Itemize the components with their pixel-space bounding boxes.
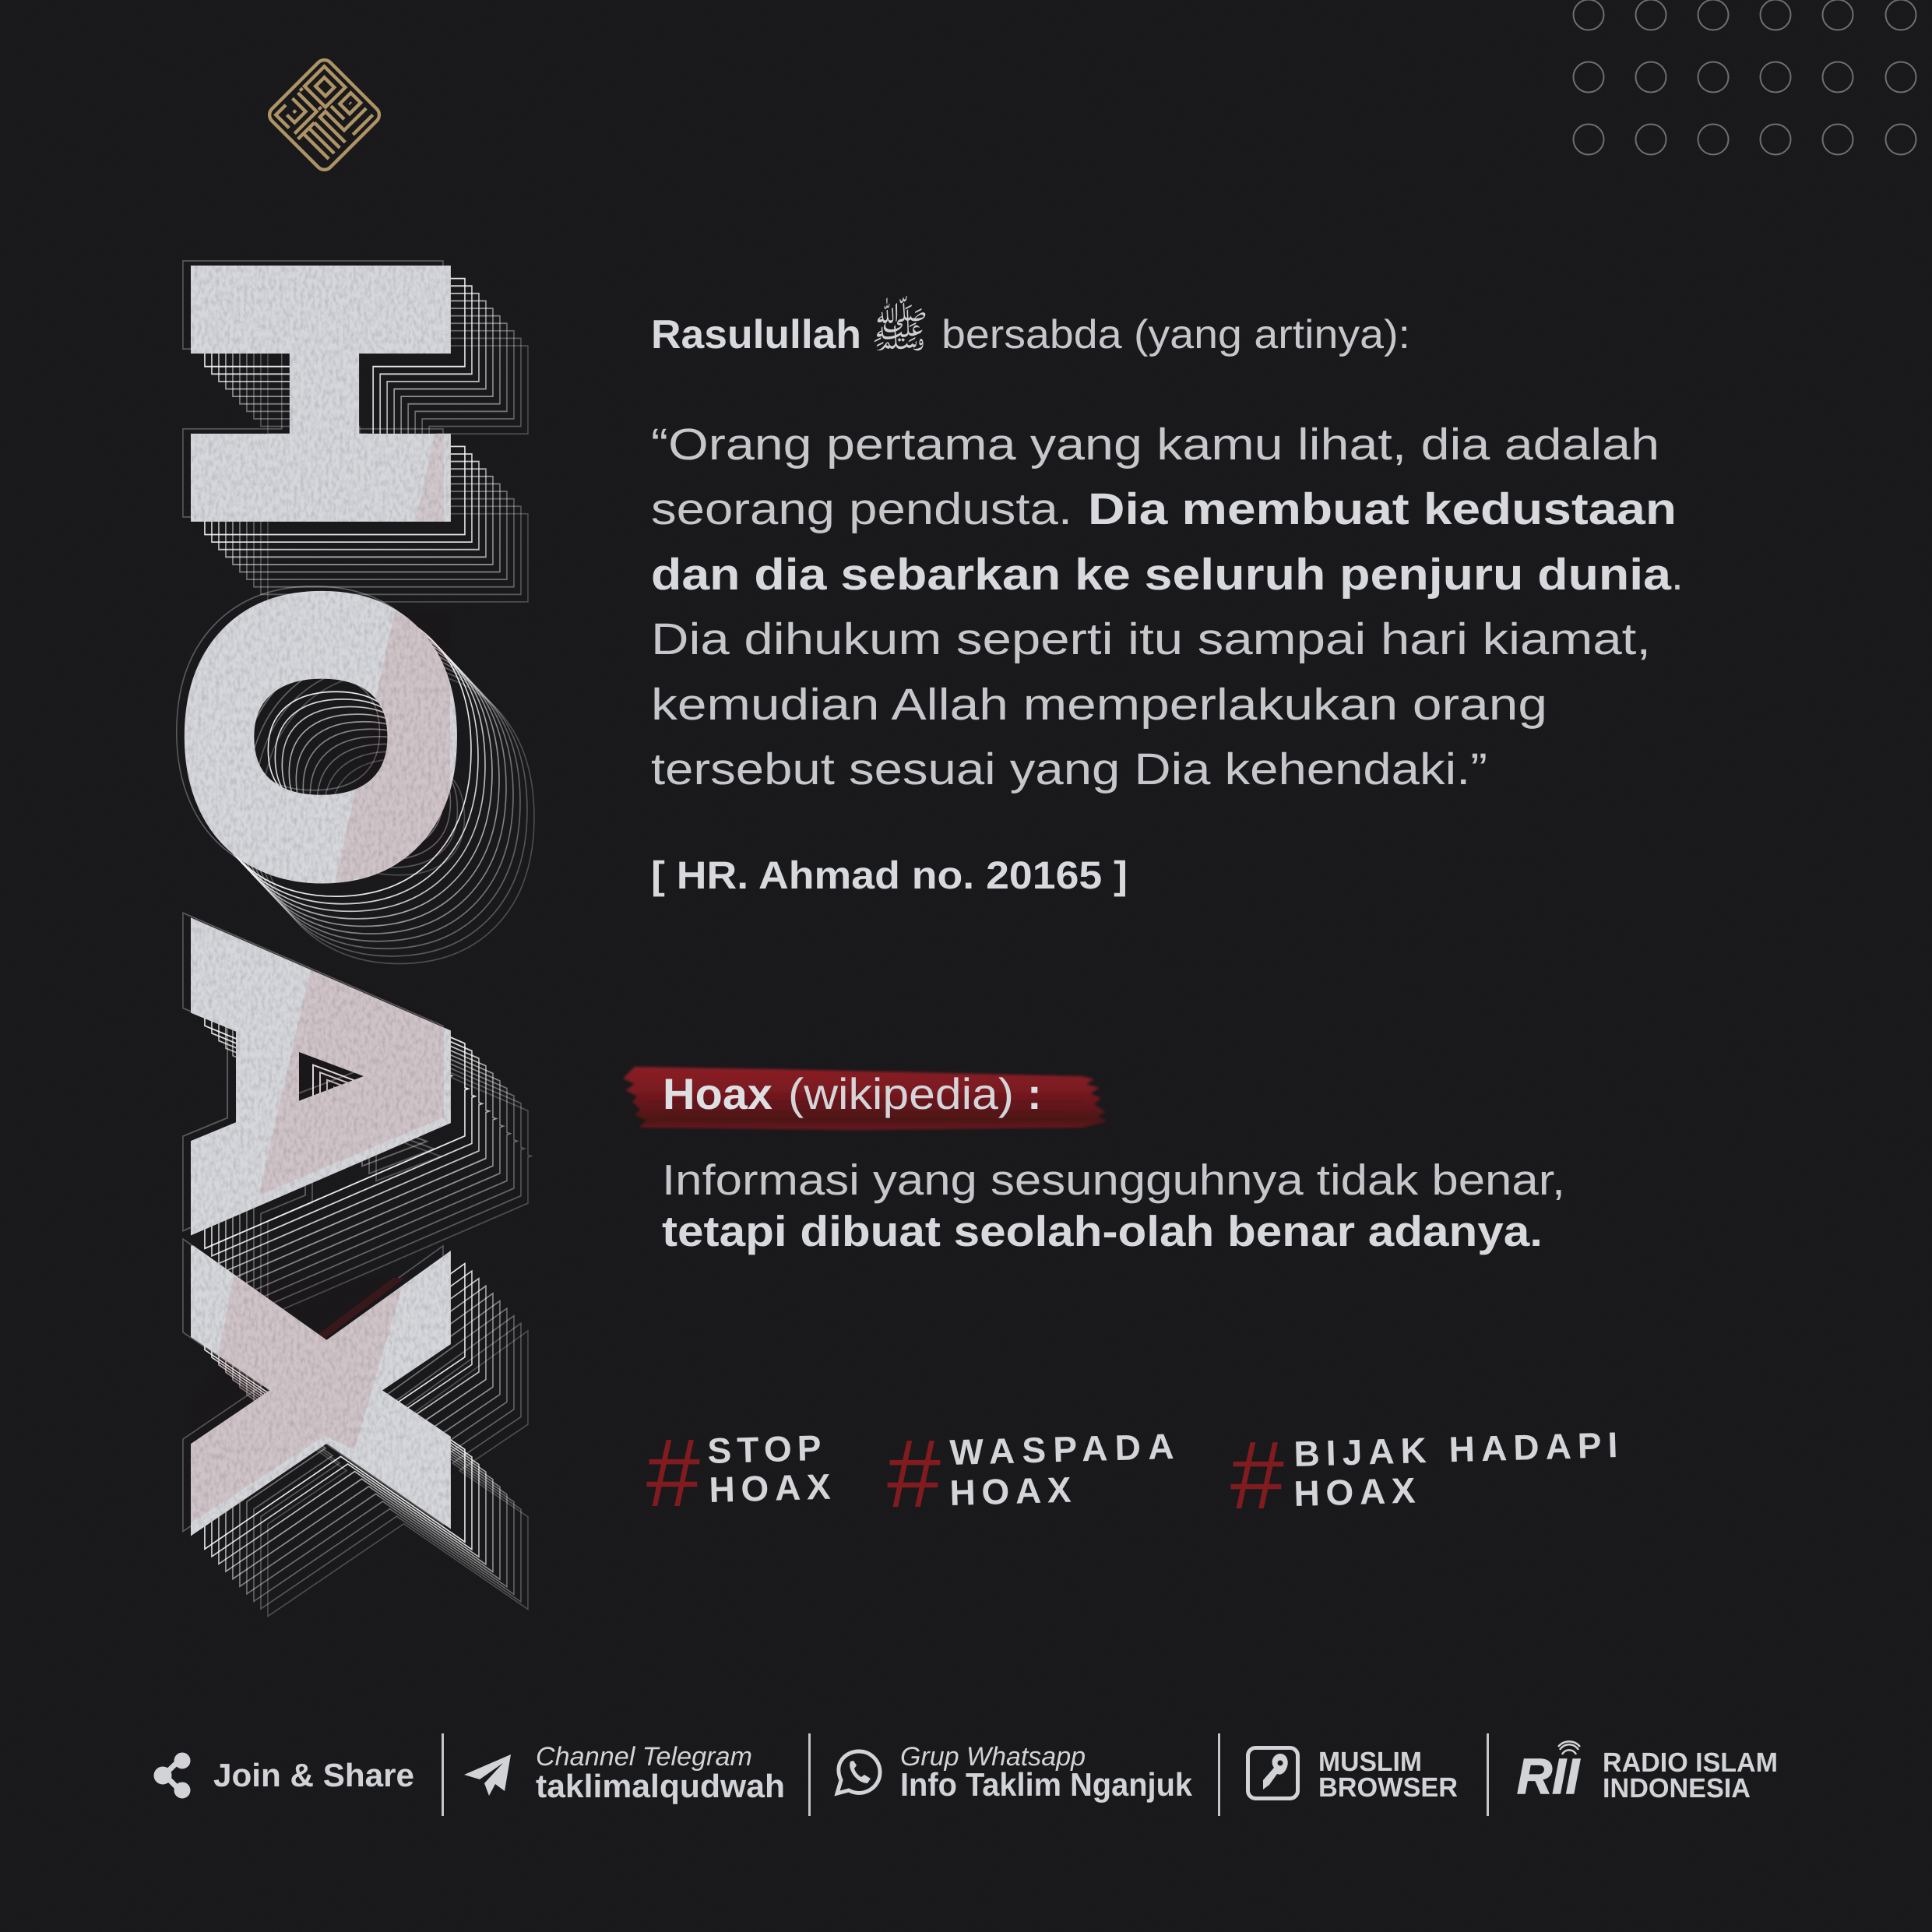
label: radio islam indonesia: RADIO ISLAM: [1603, 1747, 1778, 1778]
letter H with echo outlines: [182, 260, 529, 603]
hadith quote text block: Dia dihukum seperti itu sampai hari kiamat,: [651, 614, 1651, 664]
label: radio islam indonesia: INDONESIA: [1603, 1773, 1751, 1804]
heading: Hoax (wikipedia): (wikipedia): [788, 1069, 1014, 1118]
footer bar: [154, 1733, 1778, 1816]
icon: muslim browser: [1248, 1747, 1297, 1799]
hashtag: bijak hadapi hoax: BIJAK HADAPI: [1293, 1424, 1618, 1474]
hashtag: stop hoax: #: [646, 1420, 700, 1527]
hashtag: bijak hadapi hoax: #: [1230, 1422, 1284, 1529]
label: telegram channel: Channel Telegram: [536, 1742, 752, 1772]
hashtag: waspada hoax: [887, 1420, 1174, 1528]
hadith quote text block: Dia membuat kedustaan: [1088, 484, 1677, 534]
hashtag: bijak hadapi hoax: HOAX: [1293, 1470, 1416, 1514]
hadith quote text block: seorang pendusta.: [651, 484, 1072, 534]
icon: radio islam indonesia logo: RII: [1517, 1748, 1580, 1804]
label: join and share: Join & Share: [213, 1757, 414, 1793]
label: whatsapp group: Grup Whatsapp: [900, 1742, 1086, 1772]
hashtag: waspada hoax: HOAX: [949, 1469, 1072, 1513]
letter H with echo outlines: H: [135, 257, 509, 530]
big rotated word: HOAX: [176, 260, 535, 1617]
hadith quote text block: “Orang pertama yang kamu lihat, dia adalah: [651, 420, 1659, 470]
divider: [1218, 1733, 1220, 1816]
heading: Hoax (wikipedia): Hoax: [663, 1069, 772, 1118]
definition text: tetapi dibuat seolah-olah benar adanya.: [662, 1207, 1543, 1255]
hashtag: waspada hoax: #: [887, 1420, 941, 1528]
heading: Rasulullah bersabda: ﷺ: [871, 295, 929, 357]
hadith quote text block: .: [1671, 550, 1684, 600]
label: muslim browser: [1318, 1747, 1458, 1803]
label: telegram channel: [536, 1742, 785, 1804]
hadith quote text block: kemudian Allah memperlakukan orang: [651, 680, 1547, 730]
hashtag: stop hoax: HOAX: [709, 1466, 832, 1510]
letter O with echo outlines: O: [131, 593, 512, 882]
hadith quote text block: [651, 420, 1684, 794]
divider: [1487, 1733, 1489, 1816]
hadith quote text block: tersebut sesuai yang Dia kehendaki.”: [651, 744, 1487, 794]
label: whatsapp group: [900, 1742, 1193, 1803]
heading: Rasulullah bersabda: Rasulullah: [651, 312, 861, 357]
dot grid: outlined circles top right: [1573, 0, 1916, 154]
hashtag: stop hoax: STOP: [707, 1427, 822, 1471]
definition text: [662, 1156, 1565, 1255]
label: radio islam indonesia: [1603, 1747, 1778, 1804]
letter X with echo outlines: X: [135, 1270, 509, 1512]
label: whatsapp group: Info Taklim Nganjuk: [900, 1766, 1193, 1803]
icon: share: [154, 1753, 190, 1798]
letter A with echo outlines: A: [135, 933, 509, 1221]
label: muslim browser: MUSLIM: [1318, 1747, 1422, 1777]
letter X with echo outlines: [182, 1238, 529, 1617]
letter O with echo outlines: [176, 586, 535, 964]
hashtag: stop hoax: [646, 1420, 832, 1527]
heading: Hoax (wikipedia): :: [1027, 1069, 1042, 1118]
label: telegram channel: taklimalqudwah: [536, 1768, 785, 1804]
hadith quote text block: dan dia sebarkan ke seluruh penjuru dunia: [651, 550, 1672, 600]
red brush stroke highlight: [623, 1067, 1107, 1130]
icon: whatsapp: [837, 1751, 880, 1793]
heading: Rasulullah bersabda: [651, 295, 1410, 357]
divider: [808, 1733, 811, 1816]
label: muslim browser: BROWSER: [1318, 1772, 1458, 1803]
letter A with echo outlines: [182, 912, 533, 1310]
definition text: Informasi yang sesungguhnya tidak benar,: [662, 1156, 1565, 1204]
icon: telegram plane: [464, 1754, 511, 1796]
hashtag: waspada hoax: WASPADA: [949, 1426, 1174, 1473]
heading: Rasulullah bersabda: bersabda (yang artinya):: [941, 312, 1410, 357]
icon: gold kufic logo diamond: [266, 57, 382, 173]
divider: [442, 1733, 444, 1816]
hashtag: bijak hadapi hoax: [1230, 1422, 1618, 1529]
source citation: [ HR. Ahmad no. 20165 ]: [651, 853, 1128, 897]
heading: Hoax (wikipedia): [663, 1069, 1042, 1118]
